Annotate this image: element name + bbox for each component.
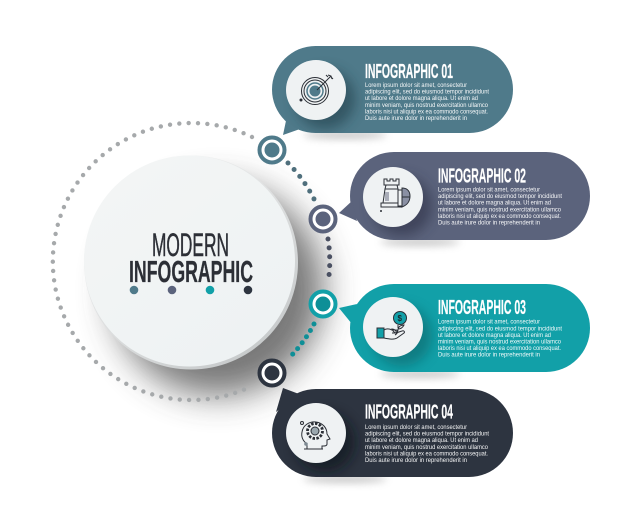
panel: infographic 04: [272, 388, 513, 483]
body text: Duis aute irure dolor in reprehenderit in: [438, 220, 540, 226]
body text: laboris nisi ut aliquip ex ea commodo consequat.: [438, 345, 561, 352]
body text: minim veniam, quis nostrud exercitation ullamco: [365, 444, 488, 451]
icon: hand with plant and coin: [377, 312, 406, 339]
connector dots 3 to 4: [288, 324, 314, 359]
node 4: [260, 360, 284, 386]
central colour dots: [130, 286, 252, 294]
body text: adipiscing elit, sed do eiusmod tempor incididunt: [365, 431, 489, 438]
connector dots 1 to 2: [288, 163, 314, 199]
icon: chess rook and shield: [380, 179, 410, 212]
body text: minim veniam, quis nostrud exercitation ullamco: [438, 206, 561, 213]
heading: INFOGRAPHIC 01: [365, 60, 453, 83]
body text: laboris nisi ut aliquip ex ea commodo consequat.: [365, 450, 488, 457]
heading: INFOGRAPHIC 03: [438, 296, 526, 319]
body text: adipiscing elit, sed do eiusmod tempor incididunt: [438, 193, 562, 200]
body text: adipiscing elit, sed do eiusmod tempor incididunt: [438, 325, 562, 332]
central circle: [84, 156, 298, 370]
body text: Duis aute irure dolor in reprehenderit in: [365, 115, 467, 122]
body text: Duis aute irure dolor in reprehenderit in: [365, 457, 467, 464]
body text: Duis aute irure dolor in reprehenderit in: [438, 352, 540, 359]
icon: head with gear: [300, 422, 330, 449]
body text: Lorem ipsum dolor sit amet, consectetur: [365, 82, 468, 89]
node 3: [310, 292, 336, 316]
central title: [129, 227, 253, 289]
heading: INFOGRAPHIC 04: [365, 400, 453, 424]
node 2: [310, 206, 336, 232]
panel: infographic 02: [339, 152, 590, 246]
body text: ut labore et dolore magna aliqua. Ut enim ad: [438, 200, 551, 207]
body text: minim veniam, quis nostrud exercitation ullamco: [365, 102, 488, 109]
icon: target: [300, 75, 333, 104]
connector dots 2 to 3: [328, 239, 330, 283]
body text: minim veniam, quis nostrud exercitation ullamco: [438, 338, 561, 346]
body text: laboris nisi ut aliquip ex ea commodo consequat.: [438, 213, 561, 220]
dollar sign: $: [398, 314, 402, 323]
body text: adipiscing elit, sed do eiusmod tempor incididunt: [365, 89, 489, 96]
node 1: [260, 138, 284, 162]
central title: MODERN: [152, 227, 229, 263]
central title: INFOGRAPHIC: [129, 254, 253, 289]
body text: Lorem ipsum dolor sit amet, consectetur: [438, 186, 541, 194]
body text: ut labore et dolore magna aliqua. Ut enim ad: [365, 95, 478, 102]
body text: [365, 424, 489, 464]
body text: [438, 186, 562, 226]
heading: INFOGRAPHIC 02: [438, 164, 526, 188]
dotted ring: [53, 123, 330, 400]
panel: infographic 03: [339, 284, 590, 378]
body text: ut labore et dolore magna aliqua. Ut enim ad: [365, 437, 478, 444]
panel: infographic 01: [272, 46, 513, 139]
body text: Lorem ipsum dolor sit amet, consectetur: [438, 319, 541, 326]
body text: laboris nisi ut aliquip ex ea commodo consequat.: [365, 108, 488, 115]
body text: ut labore et dolore magna aliqua. Ut enim ad: [438, 332, 551, 339]
body text: [365, 82, 489, 122]
body text: Lorem ipsum dolor sit amet, consectetur: [365, 424, 468, 431]
central circle shadow: [112, 184, 324, 396]
body text: [438, 319, 562, 359]
